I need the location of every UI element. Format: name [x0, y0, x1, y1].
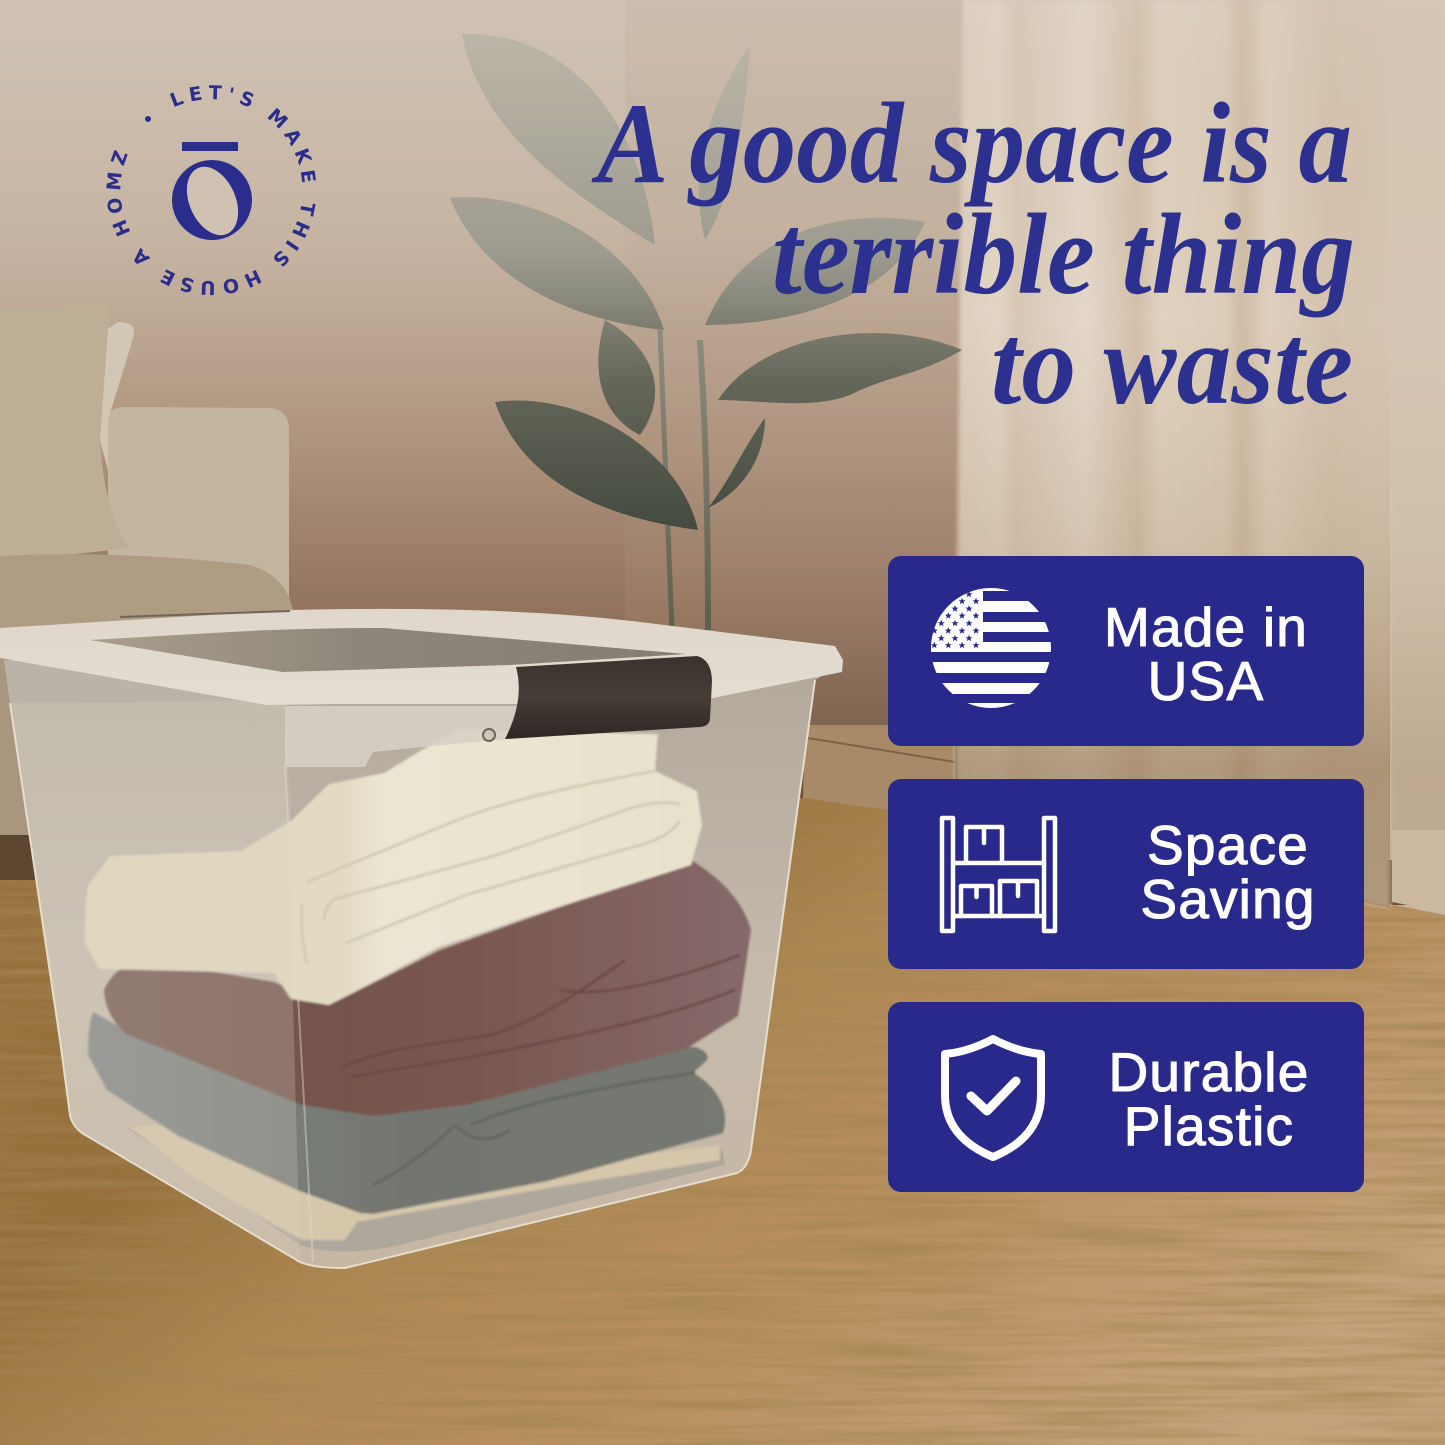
icon: US flag [931, 588, 1052, 708]
cream blanket [85, 730, 702, 1005]
headline [591, 80, 1355, 429]
headline: A good space is a [591, 80, 1352, 208]
floor with wood grain [0, 790, 1445, 1445]
curtains [955, 0, 1445, 912]
label: Durable Plastic: Durable [1108, 1041, 1310, 1103]
box frost overlay [10, 700, 300, 1262]
panel: Durable Plastic [888, 1002, 1364, 1192]
box lid [0, 609, 843, 705]
label: Space Saving: Saving [1140, 868, 1316, 930]
label: Space Saving [1140, 814, 1316, 930]
label: Durable Plastic: Plastic [1124, 1095, 1294, 1157]
label: Made in USA: Made in [1104, 596, 1308, 658]
box outline [10, 680, 815, 1268]
tan blanket [130, 1125, 720, 1240]
headline: to waste [991, 301, 1353, 429]
storage box with folded blankets [0, 609, 843, 1268]
box body [4, 660, 828, 1268]
icons [931, 588, 1058, 1161]
icon: shelf with boxes [942, 818, 1055, 931]
logo mark [172, 142, 252, 243]
baseboard [803, 725, 955, 818]
maroon blanket [104, 860, 751, 1116]
panel: Made in USA [888, 556, 1364, 746]
label: Made in USA [1104, 596, 1308, 712]
wall [0, 0, 1445, 905]
headline: terrible thing [772, 191, 1355, 319]
label: Space Saving: Space [1147, 814, 1309, 876]
panel: Space Saving [888, 779, 1364, 969]
logo badge [106, 85, 316, 296]
grey strip at box floor [125, 1127, 725, 1252]
grey blanket [88, 1012, 725, 1214]
icon: shield with check [945, 1039, 1041, 1157]
sofa [0, 303, 293, 880]
latch handle [505, 656, 712, 739]
label: Durable Plastic [1108, 1041, 1310, 1157]
circular slogan: LET'S MAKE THIS HOUSE A HOMZ [106, 85, 316, 296]
label: Made in USA: USA [1148, 650, 1264, 712]
plant [450, 34, 962, 630]
